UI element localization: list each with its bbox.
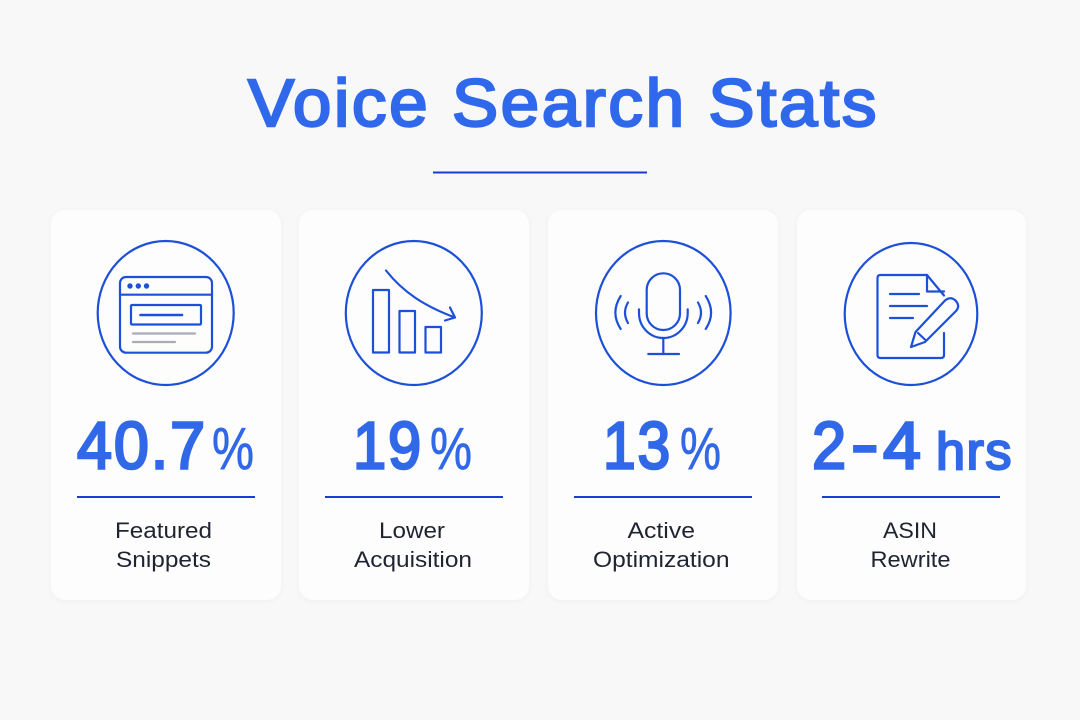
label: Active Optimization [593, 518, 730, 572]
label: Lower Acquisition [354, 518, 472, 572]
label: Active Optimization: Active [628, 518, 695, 543]
label: ASIN Rewrite: ASIN [883, 518, 937, 543]
stat: 19%: 19 [353, 408, 423, 484]
label: ASIN Rewrite [870, 518, 950, 572]
label: Lower Acquisition: Acquisition [354, 547, 472, 572]
label: Featured Snippets: Snippets [116, 547, 211, 572]
title: Voice Search Stats [248, 66, 879, 141]
label: Lower Acquisition: Lower [379, 518, 446, 543]
label: ASIN Rewrite: Rewrite [870, 547, 950, 572]
stat: 2-4 hrs: 4 [883, 408, 923, 484]
stat: 2-4 hrs: 2 [812, 408, 848, 484]
icon: browser window [98, 241, 234, 385]
stat: 13% [603, 408, 721, 484]
panel: lower acquisition [299, 210, 529, 600]
stat: 2-4 hrs [812, 406, 1013, 484]
label: Featured Snippets [115, 518, 212, 572]
icon: document and pencil [845, 243, 977, 385]
label: Active Optimization: Optimization [593, 547, 730, 572]
stat: 19%: % [430, 416, 472, 482]
panel: active optimization [548, 210, 778, 600]
panel: featured snippets [51, 210, 281, 600]
icon: declining bar chart [346, 241, 482, 385]
stat: 2-4 hrs: - [851, 406, 881, 482]
stat: 40.7%: % [212, 416, 254, 482]
stat: 2-4 hrs: hrs [936, 423, 1013, 481]
stat: 19% [353, 408, 472, 484]
stat: 13%: % [680, 416, 721, 482]
stat: 40.7%: 40.7 [77, 408, 207, 484]
stat: 13%: 13 [603, 408, 672, 484]
label: Featured Snippets: Featured [115, 518, 212, 543]
panel: asin rewrite [797, 210, 1026, 600]
icon: microphone [596, 241, 731, 385]
